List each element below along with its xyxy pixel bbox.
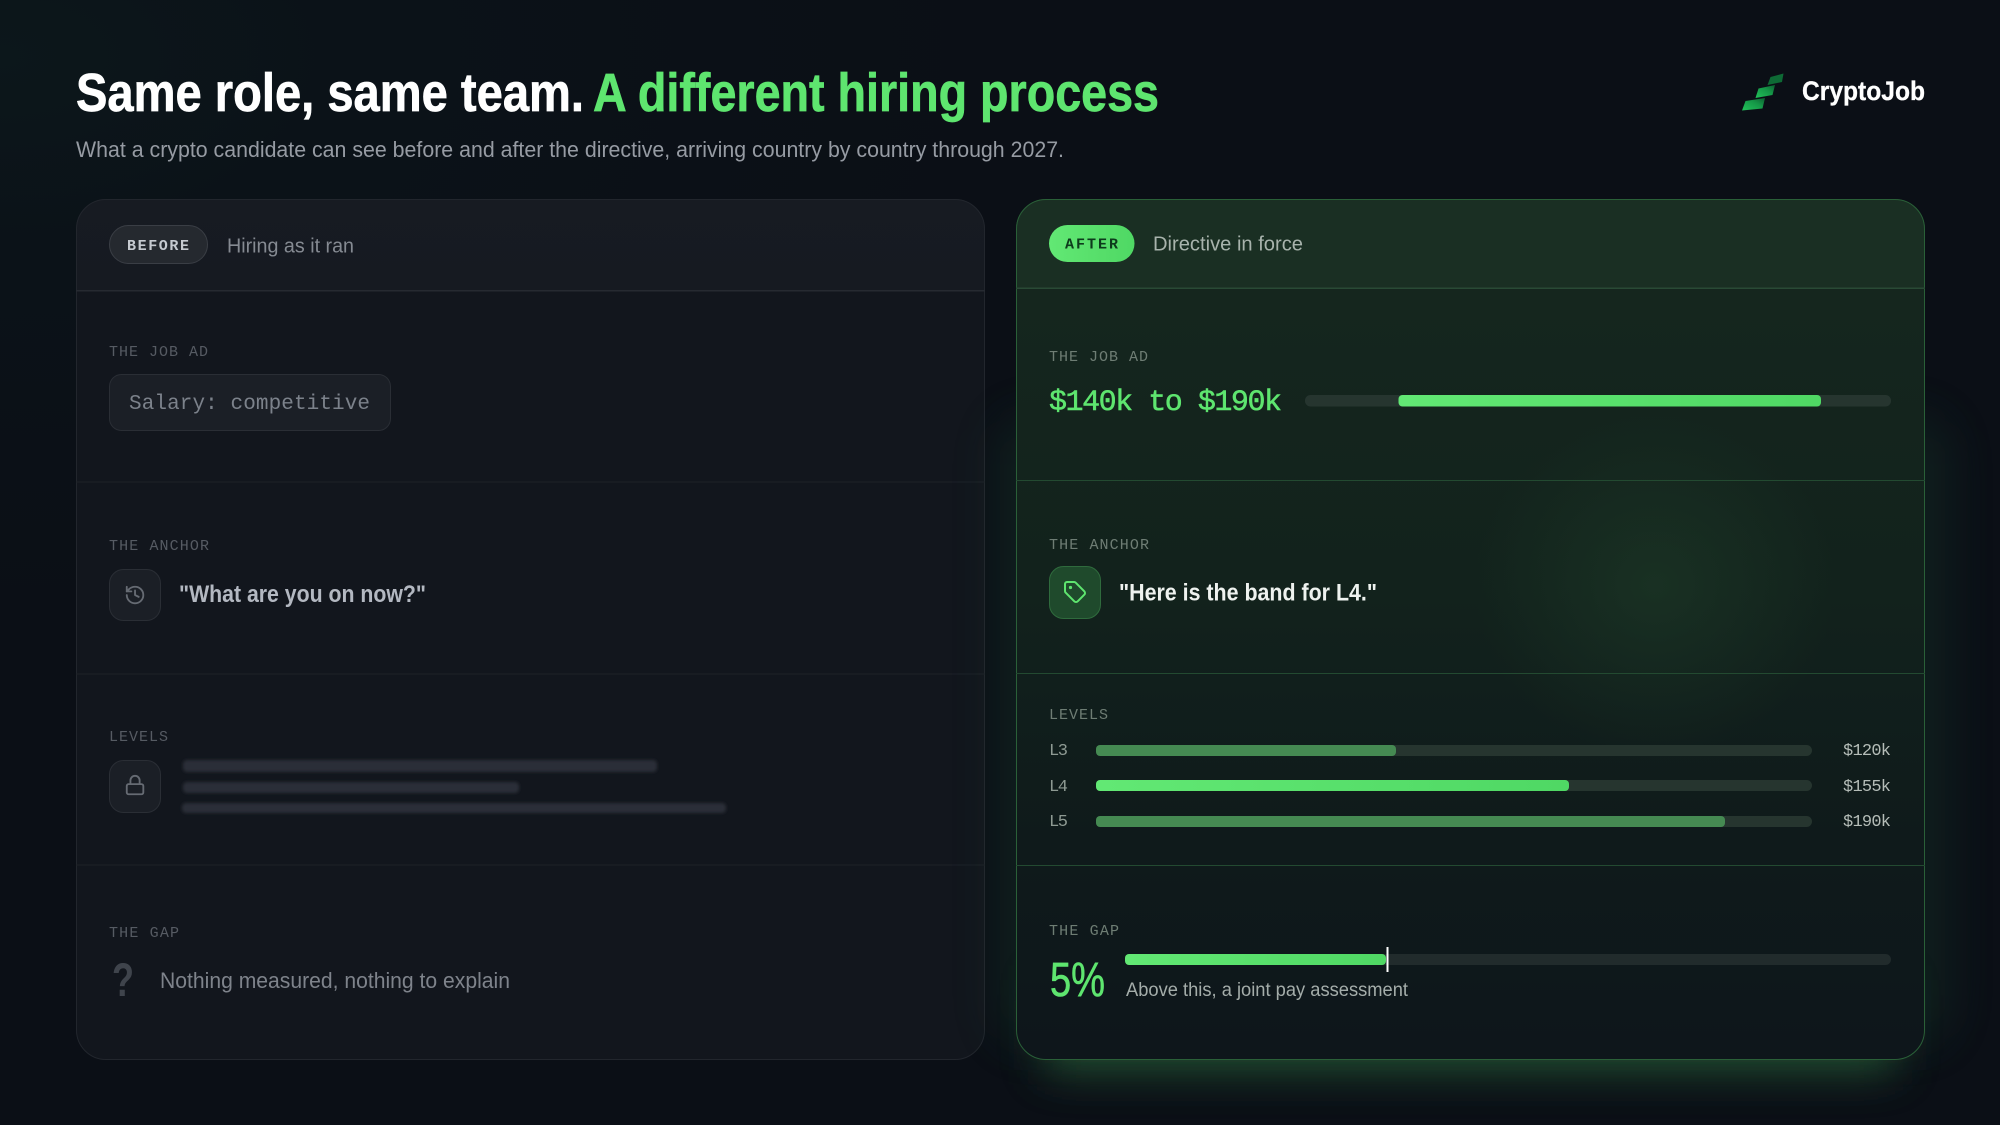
icon: logo mark [1742,74,1784,110]
panel card [1016,199,1925,1060]
label: the gap: THE GAP [1049,923,1119,940]
salary chip: Salary: competitive [129,393,370,416]
icon: tag [1050,566,1100,618]
level row L5: L5 [1049,813,1068,832]
before pill: BEFORE [127,238,189,255]
panel inner glow [1574,513,1735,668]
panel header background [1017,284,1924,288]
icon: history clock [110,570,160,620]
title: A different hiring process [593,63,1159,123]
label: the job ad: THE JOB AD [1049,349,1148,366]
icon: lock [110,760,160,812]
salary range: $140k to $190k [1049,386,1282,420]
blurred level bars [182,760,726,813]
level row L4: L4 [1049,778,1068,797]
panel glow [1000,420,1945,1070]
after header text: Directive in force [1153,232,1303,256]
anchor quote: "What are you on now?" [179,581,426,608]
label: levels: LEVELS [109,729,168,746]
before pill [110,226,208,264]
level row L5 [1049,813,1891,832]
title [76,63,1159,123]
panel header background [76,199,985,290]
salary range bar [1305,395,1891,406]
level row L3: L3 [1049,742,1068,761]
level row L3: $120k [1843,742,1891,761]
level row L4: $155k [1843,778,1891,797]
gap threshold bar [1125,947,1891,972]
anchor quote: "Here is the band for L4." [1119,580,1377,606]
after pill [1049,225,1134,262]
logo: CryptoJob [1742,74,1925,110]
level row L3 [1049,742,1891,761]
title: Same role, same team. [76,63,584,123]
label: levels: LEVELS [1049,707,1108,724]
gap caption: Above this, a joint pay assessment [1126,979,1409,1001]
panel card [76,199,985,1060]
label: the gap: THE GAP [109,925,179,942]
salary chip [110,374,390,430]
level row L4 [1049,778,1891,797]
level row L5: $190k [1843,813,1891,832]
label: the job ad: THE JOB AD [109,344,208,361]
after pill: AFTER [1065,236,1118,254]
gap percentage: 5% [1050,954,1105,1007]
gap text: Nothing measured, nothing to explain [160,968,510,993]
subtitle: What a crypto candidate can see before and after the directive, arriving country by country through 2027. [76,137,1064,162]
label: the anchor: THE ANCHOR [1049,537,1149,554]
panel: before [76,199,985,1060]
before header text: Hiring as it ran [227,234,354,258]
logo wordmark: CryptoJob [1802,76,1925,106]
label: the anchor: THE ANCHOR [109,538,209,555]
panel: after [1000,199,1945,1070]
icon: question mark: ? [112,953,134,1006]
